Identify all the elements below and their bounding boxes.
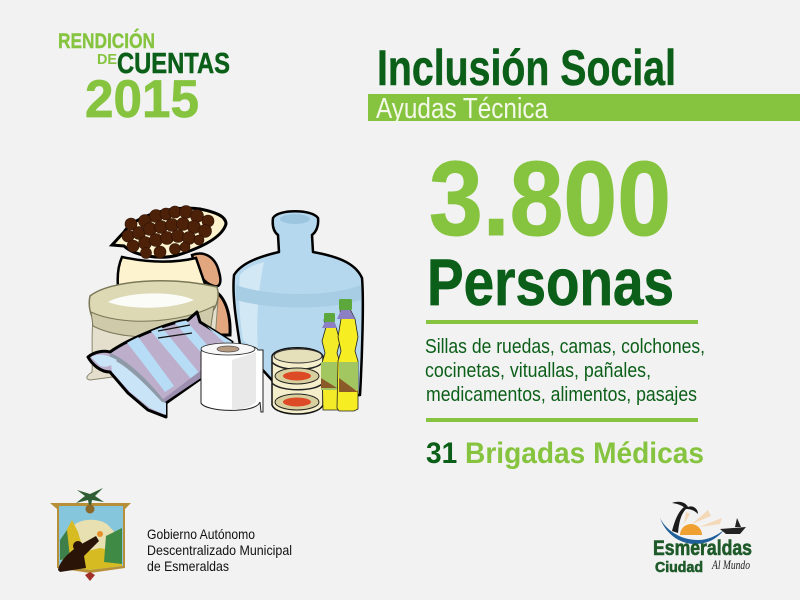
text block: government name: de Esmeraldas <box>147 558 229 574</box>
text block: government name: Descentralizado Municipal <box>147 542 292 558</box>
icon: coat of arms <box>50 488 131 581</box>
icon: oil bottles <box>321 299 358 411</box>
icon: pillow <box>88 312 238 417</box>
text block: aid list: Sillas de ruedas, camas, colchones, <box>425 336 705 358</box>
icon: water jug <box>233 211 363 400</box>
icon: rice sack <box>87 281 218 380</box>
text block: government name <box>147 526 292 574</box>
heading: Personas: Personas <box>427 245 674 319</box>
illustration: food and supplies <box>87 206 363 417</box>
icon: sun and palm <box>660 502 746 544</box>
logo: Esmeraldas Ciudad al Mundo: Ciudad <box>655 559 703 576</box>
icon: sack of beans <box>112 206 230 335</box>
logo: Esmeraldas Ciudad al Mundo: Esmeraldas <box>653 537 752 560</box>
subtitle band <box>368 93 800 125</box>
text block: aid list <box>425 336 705 406</box>
logo: Rendición de Cuentas 2015: RENDICIÓN <box>58 29 155 53</box>
logo: Rendición de Cuentas 2015 <box>58 29 230 129</box>
big number: 3.800 <box>429 140 671 258</box>
logo: Rendición de Cuentas 2015: 2015 <box>85 70 199 129</box>
text block: government name: Gobierno Autónomo <box>147 526 255 542</box>
logo: Esmeraldas Ciudad al Mundo <box>653 502 752 576</box>
logo: Rendición de Cuentas 2015: DE <box>97 51 117 68</box>
logo: Esmeraldas Ciudad al Mundo: Al Mundo <box>711 557 750 572</box>
text block: aid list: medicamentos, alimentos, pasajes <box>426 384 697 406</box>
subtitle band: Ayudas Técnica <box>376 93 549 125</box>
icon: toilet paper roll <box>201 343 263 412</box>
title: Inclusión Social <box>377 40 676 96</box>
icon: stacked tins <box>272 348 323 414</box>
logo: Rendición de Cuentas 2015: CUENTAS <box>117 48 230 80</box>
text block: aid list: cocinetas, vituallas, pañales, <box>425 360 651 382</box>
medical brigades stat: 31 Brigadas Médicas <box>426 437 704 470</box>
